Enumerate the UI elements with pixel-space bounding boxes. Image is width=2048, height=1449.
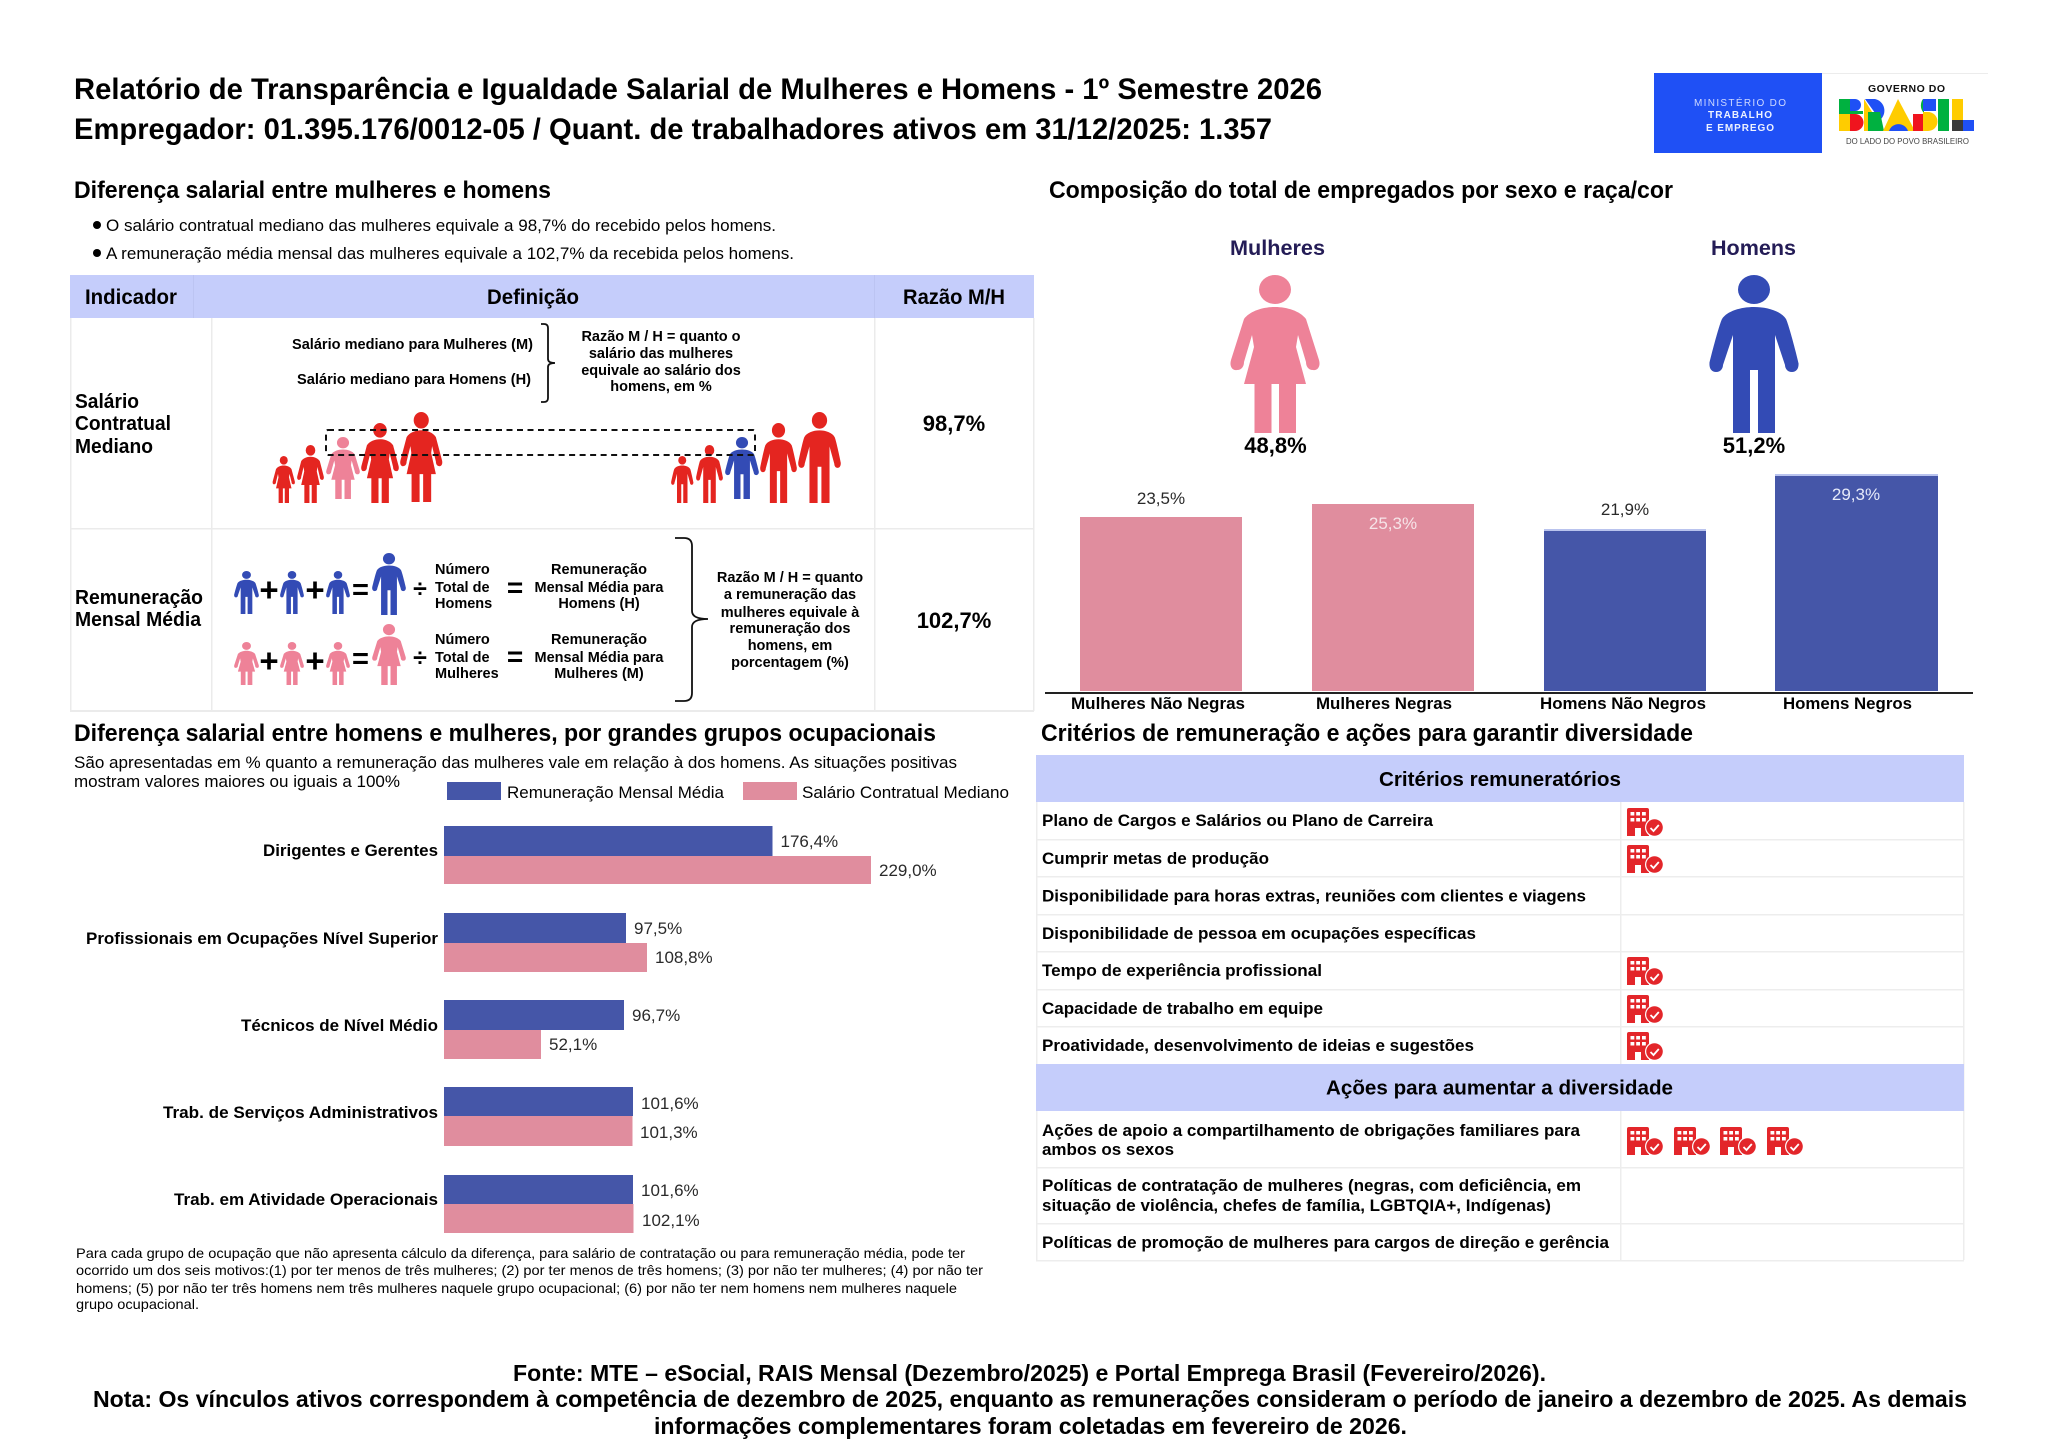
definition text: salário mediano xyxy=(292,337,533,388)
header: ações para diversidade: Ações para aumentar a diversidade xyxy=(1326,1076,1673,1100)
note: razão M/H remuneração: homens, em xyxy=(748,638,832,654)
bullets: resumo: O salário contratual mediano das mulheres equivale a 98,7% do recebido pelos homens. xyxy=(106,216,776,235)
row: políticas de contratação: Políticas de contratação de mulheres (negras, com deficiência, em xyxy=(1042,1176,1581,1195)
brace: remuneração xyxy=(675,538,708,701)
note: razão M/H salário xyxy=(581,329,741,395)
row: plano de cargos: Plano de Cargos e Salários ou Plano de Carreira xyxy=(1042,811,1434,830)
formula: mulheres: Remuneração xyxy=(551,632,647,648)
legend: Remuneração Mensal Média xyxy=(507,783,725,802)
group: serviços administrativos: Trab. de Serviços Administrativos xyxy=(163,1103,438,1122)
logo: ministério e governo: GOVERNO DO xyxy=(1868,83,1945,95)
note: razão M/H remuneração: mulheres equivale à xyxy=(721,605,860,621)
heading: grupos ocupacionais: Diferença salarial entre homens e mulheres, por grandes grupos ocupacionais xyxy=(74,720,936,747)
logo: ministério e governo: TRABALHO xyxy=(1708,110,1772,121)
text: descrição xyxy=(74,753,957,791)
row label: salário contratual mediano: Salário xyxy=(75,391,139,413)
footer: fonte e nota: Nota: Os vínculos ativos correspondem à competência de dezembro de 2025, enquanto as remunerações consideram o período de janeiro a dezembro de 2025. As demais xyxy=(93,1386,1967,1412)
bar chart: grupos ocupacionais xyxy=(86,826,937,1233)
heading: diferença salarial: Diferença salarial entre mulheres e homens xyxy=(74,177,551,204)
formula: mulheres: Total de xyxy=(435,650,490,666)
row: políticas de contratação: situação de violência, chefes de família, LGBTQIA+, Indígenas) xyxy=(1042,1196,1551,1215)
formula: homens: ÷ xyxy=(413,575,427,603)
formula: homens: + xyxy=(305,571,325,608)
heading: critérios: Critérios de remuneração e ações para garantir diversidade xyxy=(1041,720,1693,747)
row: políticas de contratação xyxy=(1042,1176,1581,1215)
people: homens em ordem de salário xyxy=(671,412,841,503)
footnote: grupo ocupacional. xyxy=(76,1296,199,1312)
footnote xyxy=(76,1245,983,1312)
group: dirigentes e gerentes: Dirigentes e Gerentes xyxy=(263,841,438,860)
group: técnicos nível médio: 52,1% xyxy=(549,1035,597,1054)
note: razão M/H salário: Razão M / H = quanto o xyxy=(581,329,741,345)
note: razão M/H salário: equivale ao salário dos xyxy=(581,363,741,379)
formula: homens: = xyxy=(352,574,369,606)
text: descrição: São apresentadas em % quanto a remuneração das mulheres vale em relação à dos homens. As situações positivas xyxy=(74,753,957,772)
bar chart: sexo e raça/cor xyxy=(1045,474,1973,713)
formula: homens: + xyxy=(259,571,279,608)
panel: mulheres xyxy=(1230,237,1325,458)
note: razão M/H salário: salário das mulheres xyxy=(589,346,733,362)
group: atividade operacionais xyxy=(174,1175,700,1233)
formula: homens xyxy=(234,553,664,615)
note: razão M/H remuneração: Razão M / H = quanto xyxy=(717,570,863,586)
value: 102,7%: 102,7% xyxy=(917,608,991,633)
row label: salário contratual mediano: Contratual xyxy=(75,413,171,435)
formula: mulheres: Número xyxy=(435,632,490,648)
row: obrigações familiares: Ações de apoio a compartilhamento de obrigações familiares para xyxy=(1042,1121,1581,1140)
formula: homens: Remuneração xyxy=(551,562,647,578)
logo: ministério e governo: MINISTÉRIO DO xyxy=(1694,96,1786,109)
group: dirigentes e gerentes: 229,0% xyxy=(879,861,937,880)
bullets: resumo xyxy=(93,216,794,263)
group: profissionais nível superior: 108,8% xyxy=(655,948,713,967)
row: ocupações específicas: Disponibilidade de pessoa em ocupações específicas xyxy=(1042,924,1476,943)
note: razão M/H remuneração: porcentagem (%) xyxy=(731,655,849,671)
bar chart: sexo e raça/cor: 21,9% xyxy=(1601,500,1649,519)
formula: homens: Mensal Média para xyxy=(535,580,664,596)
group: profissionais nível superior xyxy=(86,913,713,972)
note: razão M/H remuneração: a remuneração das xyxy=(724,587,856,603)
group: profissionais nível superior: 97,5% xyxy=(634,919,682,938)
group: atividade operacionais: 101,6% xyxy=(641,1181,699,1200)
row label: remuneração mensal média xyxy=(75,587,203,631)
row: obrigações familiares: ambos os sexos xyxy=(1042,1140,1174,1159)
bar chart: sexo e raça/cor: Homens Negros xyxy=(1783,694,1912,713)
panel: tabela de indicadores xyxy=(70,275,1034,712)
icon: homem xyxy=(1709,275,1799,433)
footnote: ocorrido um dos seis motivos:(1) por ter menos de três mulheres; (2) por ter menos de três homens; (3) por não ter mulheres; (4) por não ter xyxy=(76,1262,983,1278)
footnote: Para cada grupo de ocupação que não apresenta cálculo da diferença, para salário de contratação ou para remuneração média, pode ter xyxy=(76,1245,965,1261)
group: dirigentes e gerentes: 176,4% xyxy=(780,832,838,851)
panel: homens xyxy=(1709,237,1799,458)
definition text: salário mediano: Salário mediano para Mulheres (M) xyxy=(292,337,533,353)
row: proatividade: Proatividade, desenvolvimento de ideias e sugestões xyxy=(1042,1036,1474,1055)
row: obrigações familiares xyxy=(1042,1121,1804,1159)
logo: ministério e governo: E EMPREGO xyxy=(1706,123,1774,134)
note: razão M/H salário: homens, em % xyxy=(610,379,712,395)
value: 98,7%: 98,7% xyxy=(923,411,985,436)
formula: mulheres: = xyxy=(507,641,523,672)
dashed box: medianas xyxy=(326,430,755,455)
icon: mulher xyxy=(1230,275,1320,433)
group: técnicos nível médio: 96,7% xyxy=(632,1006,680,1025)
group: atividade operacionais: 102,1% xyxy=(642,1211,700,1230)
formula: homens: Número xyxy=(435,562,490,578)
bar chart: sexo e raça/cor: Mulheres Negras xyxy=(1316,694,1452,713)
bar chart: sexo e raça/cor: Mulheres Não Negras xyxy=(1071,694,1245,713)
text: descrição: mostram valores maiores ou iguais a 100% xyxy=(74,772,400,791)
title: Relatório de Transparência e Igualdade Salarial de Mulheres e Homens - 1º Semestre 2026 xyxy=(74,73,1322,106)
formula: mulheres: Mensal Média para xyxy=(535,650,664,666)
formula: homens: Homens xyxy=(435,596,492,612)
row label: salário contratual mediano xyxy=(75,391,171,458)
footer: fonte e nota: Fonte: MTE – eSocial, RAIS Mensal (Dezembro/2025) e Portal Emprega Brasil (Fevereiro/2026). xyxy=(513,1360,1546,1386)
row: tempo de experiência xyxy=(1042,957,1664,986)
panel: homens: 51,2% xyxy=(1723,433,1785,458)
formula: mulheres: = xyxy=(352,643,369,675)
formula: mulheres: + xyxy=(259,642,279,679)
row: metas de produção xyxy=(1042,845,1664,874)
title xyxy=(74,73,1322,146)
formula: mulheres: Mulheres (M) xyxy=(554,666,644,682)
row label: remuneração mensal média: Remuneração xyxy=(75,587,203,609)
group: serviços administrativos xyxy=(163,1087,699,1146)
panel: critérios e ações xyxy=(1036,755,1964,1262)
row label: remuneração mensal média: Mensal Média xyxy=(75,609,202,631)
group: dirigentes e gerentes xyxy=(263,826,937,884)
row: trabalho em equipe: Capacidade de trabalho em equipe xyxy=(1042,999,1323,1018)
group: técnicos nível médio xyxy=(241,1000,680,1059)
legend: Salário Contratual Mediano xyxy=(802,783,1009,802)
header: ações para diversidade xyxy=(1036,1064,1964,1111)
bar chart: sexo e raça/cor: 29,3% xyxy=(1832,485,1880,504)
row: tempo de experiência: Tempo de experiência profissional xyxy=(1042,961,1322,980)
formula: homens: Total de xyxy=(435,580,490,596)
legend xyxy=(447,782,1009,802)
people: mulheres em ordem de salário xyxy=(273,412,442,503)
table header xyxy=(85,286,1005,309)
note: razão M/H remuneração xyxy=(717,570,863,671)
panel: mulheres: Mulheres xyxy=(1230,237,1325,260)
panel: mulheres: 48,8% xyxy=(1244,433,1307,458)
formula: mulheres: + xyxy=(305,642,325,679)
brace: salário mediano xyxy=(541,324,555,402)
formula: homens: = xyxy=(507,572,523,603)
row: proatividade xyxy=(1042,1032,1664,1061)
note: razão M/H remuneração: remuneração dos xyxy=(730,621,850,637)
table header: Indicador xyxy=(85,286,177,309)
footnote: homens; (5) por não ter três homens nem três mulheres naquele grupo ocupacional; (6) por não ter nem homens nem mulheres naquele xyxy=(76,1280,957,1296)
definition text: salário mediano: Salário mediano para Homens (H) xyxy=(297,372,531,388)
formula: mulheres: ÷ xyxy=(413,644,427,672)
bar chart: sexo e raça/cor: 25,3% xyxy=(1369,514,1417,533)
row: políticas de promoção: Políticas de promoção de mulheres para cargos de direção e gerência xyxy=(1042,1233,1610,1252)
formula: mulheres: Mulheres xyxy=(435,666,499,682)
row: plano de cargos xyxy=(1042,808,1664,837)
footer: fonte e nota xyxy=(93,1360,1967,1439)
row: horas extras: Disponibilidade para horas extras, reuniões com clientes e viagens xyxy=(1042,886,1586,906)
group: serviços administrativos: 101,3% xyxy=(640,1123,698,1142)
bullets: resumo: A remuneração média mensal das mulheres equivale a 102,7% da recebida pelos homens. xyxy=(106,244,794,263)
group: técnicos nível médio: Técnicos de Nível Médio xyxy=(241,1016,438,1035)
row: trabalho em equipe xyxy=(1042,995,1664,1024)
title: Empregador: 01.395.176/0012-05 / Quant. de trabalhadores ativos em 31/12/2025: 1.357 xyxy=(74,113,1272,146)
bar chart: sexo e raça/cor: Homens Não Negros xyxy=(1540,694,1706,713)
group: profissionais nível superior: Profissionais em Ocupações Nível Superior xyxy=(86,929,438,948)
heading: composição: Composição do total de empregados por sexo e raça/cor xyxy=(1049,177,1673,204)
group: serviços administrativos: 101,6% xyxy=(641,1094,699,1113)
logo: ministério e governo: DO LADO DO POVO BRASILEIRO xyxy=(1846,137,1969,146)
header: critérios remuneratórios: Critérios remuneratórios xyxy=(1379,768,1621,791)
header: critérios remuneratórios xyxy=(1036,755,1964,802)
table header: Definição xyxy=(487,286,579,309)
table header: Razão M/H xyxy=(903,286,1005,309)
panel: homens: Homens xyxy=(1711,237,1796,260)
formula: mulheres xyxy=(234,624,664,685)
row label: salário contratual mediano: Mediano xyxy=(75,436,153,458)
formula: homens: Homens (H) xyxy=(558,596,640,612)
logo: ministério e governo xyxy=(1654,73,1988,153)
footer: fonte e nota: informações complementares foram coletadas em fevereiro de 2026. xyxy=(654,1413,1407,1439)
bar chart: sexo e raça/cor: 23,5% xyxy=(1137,489,1185,508)
row: metas de produção: Cumprir metas de produção xyxy=(1042,849,1269,868)
group: atividade operacionais: Trab. em Atividade Operacionais xyxy=(174,1190,438,1209)
